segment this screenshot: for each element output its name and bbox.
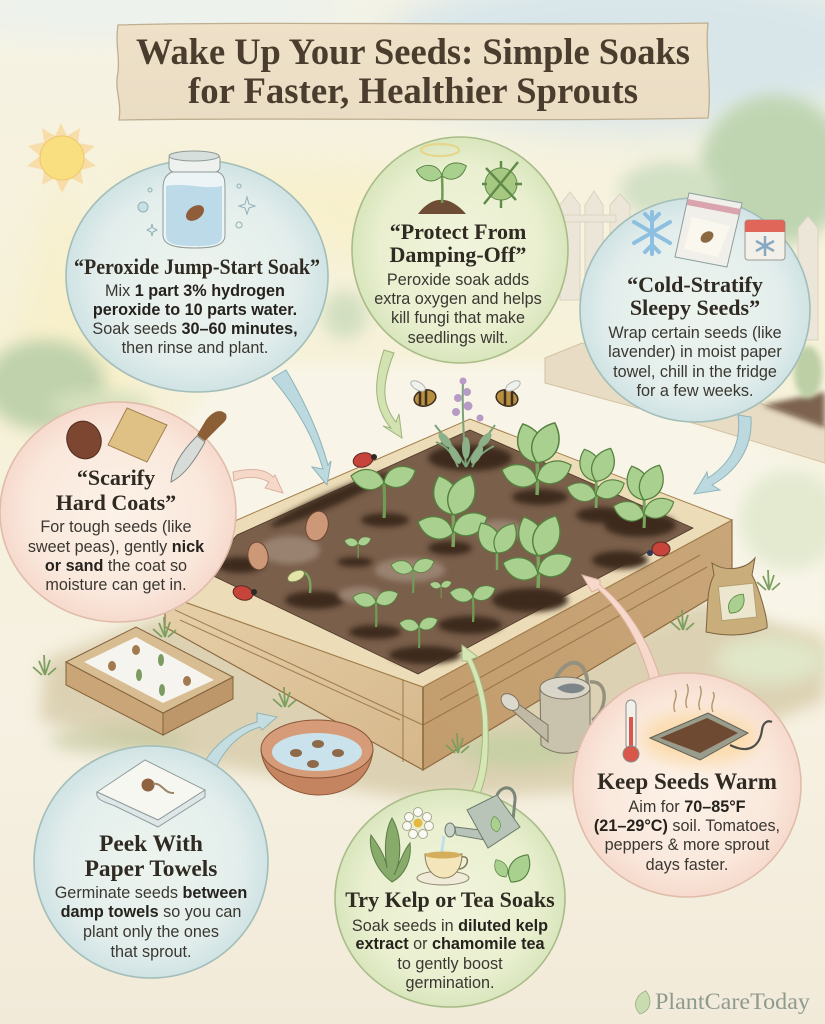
body text: Germinate seeds between [55,884,247,902]
arrow: scarify to bed [233,470,283,493]
body text: Aim for 70–85°F [628,798,746,816]
body text: extract or chamomile tea [356,935,545,953]
terracotta bowl with soaking seeds [261,720,373,795]
body text: Wrap certain seeds (like [608,324,782,342]
icon: bean, sandpaper, knife [62,408,227,482]
body text: damp towels so you can [61,903,241,921]
title banner: Wake Up Your Seeds: Simple Soaks [136,32,690,73]
grass tufts [33,570,780,753]
heading: Peek With [99,831,203,857]
body text: or sand the coat so [45,557,187,575]
body text [28,518,205,594]
body text: to gently boost [397,955,503,973]
watering can [498,663,604,753]
icon: kelp, chamomile, tea, watering can, leaf [370,788,536,887]
lavender plant [435,378,495,467]
panel: keep seeds warm [573,673,801,897]
heading: “Protect From [390,219,526,244]
heading: “Scarify [77,465,155,490]
ladybugs [232,451,670,602]
arrow: damping-off to bed [377,350,402,438]
arrow: cold stratify to bed [694,415,751,494]
body text: plant only the ones [83,923,219,941]
panel: scarify: Hard Coats” [56,490,176,515]
body text: Soak seeds in diluted kelp [352,917,548,935]
heading: Keep Seeds Warm [597,769,777,794]
body text: that sprout. [110,943,192,961]
panel: protect from damping-off [352,137,568,363]
bed rim [165,419,732,687]
title banner: for Faster, Healthier Sprouts [188,71,638,112]
heading: Try Kelp or Tea Soaks [345,887,555,912]
body text: sweet peas), gently nick [28,538,205,556]
body text: moisture can get in. [45,576,187,594]
body text [608,324,782,400]
body text: (21–29°C) soil. Tomatoes, [594,817,780,835]
soil [205,430,693,674]
panel: kelp or tea soaks [335,788,565,1007]
body text: days faster. [646,856,728,874]
body text: germination. [405,974,495,992]
body text: kill fungi that make [391,309,525,327]
body text [594,798,780,874]
panel: scarify [0,402,236,622]
body text: extra oxygen and helps [374,290,542,308]
icon: sun [27,123,96,193]
arrow: warm to bed [582,575,661,684]
body text: peroxide to 10 parts water. [93,301,297,319]
background picket fence [556,191,818,340]
body text: towel, chill in the fridge [613,363,777,381]
bed left face [165,595,423,770]
body text: For tough seeds (like [40,518,192,536]
heading: “Peroxide Jump-Start Soak” [74,254,320,279]
icon: snowflake, seed bag, calendar [634,193,785,267]
body text: seedlings wilt. [408,329,508,347]
bean seeds in soil [246,509,332,572]
panel: peek with paper towels [34,746,268,978]
icon: thermometer and heat mat [623,684,772,764]
panel: peroxide soak [66,151,328,392]
seed sack [706,558,767,635]
icon: sprout with halo and crossed fungus [415,144,522,214]
body text [92,282,298,357]
raised bed with seedlings [165,378,732,770]
body text: Soak seeds 30–60 minutes, [92,320,298,338]
panel: protect from damping-off: Damping-Off” [390,242,526,267]
watermark: PlantCareToday: PlantCareToday [655,989,811,1014]
arrow: peroxide to bed [272,370,331,485]
panel: cold stratify [580,193,810,422]
body text: then rinse and plant. [122,339,268,357]
arrow: paper towels to bowl [203,713,277,768]
panel: peek with paper towels: Paper Towels [85,856,217,882]
body text [55,884,247,961]
body text: for a few weeks. [637,382,753,400]
body text: Peroxide soak adds [387,271,529,289]
body text [352,917,548,992]
body text: peppers & more sprout [605,836,770,854]
seedlings [286,418,677,648]
body text [374,271,542,347]
paper towel germination tray [66,627,233,735]
body text: lavender) in moist paper [608,343,782,361]
body text: Mix 1 part 3% hydrogen [105,282,285,300]
panel: cold stratify: Sleepy Seeds” [630,295,760,320]
background raised bed [545,343,825,463]
icons: bees [409,379,522,409]
bed right face [423,520,732,770]
heading: “Cold-Stratify [627,272,763,297]
title banner [117,23,709,120]
icon: folded paper towel with sprouting seed [97,760,205,827]
icon: mason jar with seed [138,151,255,248]
arrow: kelp to bed [462,645,488,794]
